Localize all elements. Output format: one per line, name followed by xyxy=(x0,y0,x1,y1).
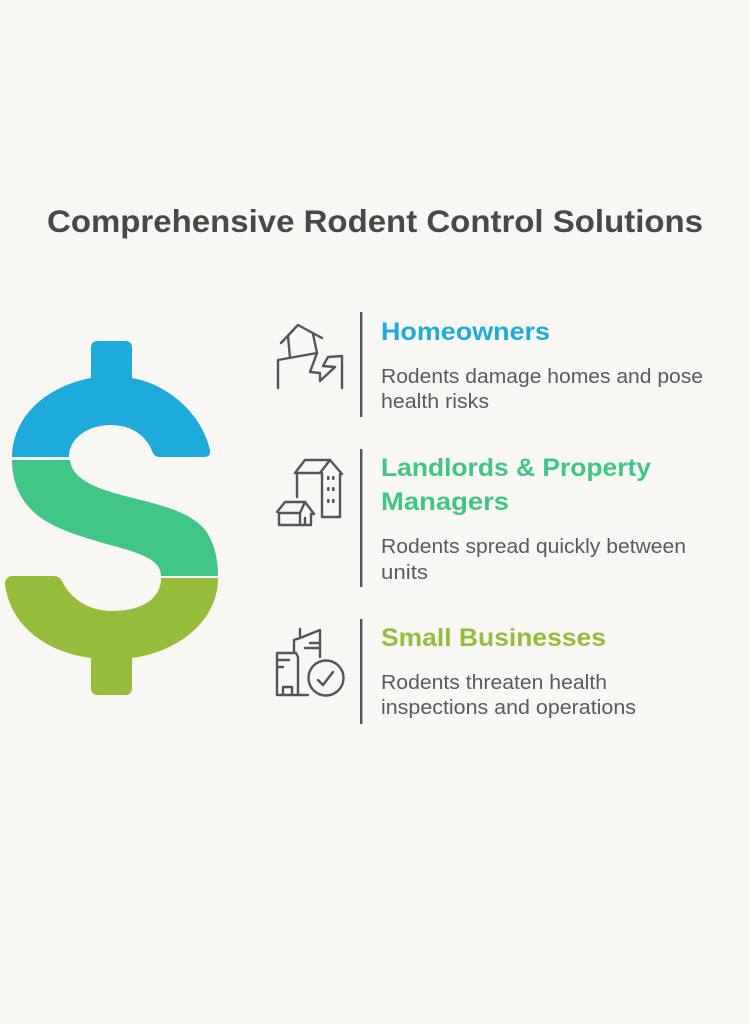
description: homeowners xyxy=(381,366,703,413)
icon: houses and apartment building xyxy=(277,460,342,525)
description: landlords xyxy=(381,536,686,584)
heading: landlords: Landlords & Property xyxy=(381,454,651,482)
icon: buildings with check mark xyxy=(277,629,344,696)
description: homeowners: health risks xyxy=(381,391,489,413)
description: small businesses xyxy=(381,672,636,719)
description: small businesses: Rodents threaten health xyxy=(381,672,607,694)
description: homeowners: Rodents damage homes and pose xyxy=(381,366,703,388)
description: small businesses: inspections and operations xyxy=(381,697,636,719)
heading: small businesses: Small Businesses xyxy=(381,624,606,652)
panel: homeowners xyxy=(278,312,703,417)
divider xyxy=(360,619,362,724)
panel: landlords and property managers xyxy=(277,449,686,587)
description: landlords: Rodents spread quickly between xyxy=(381,536,686,558)
heading: homeowners: Homeowners xyxy=(381,318,550,346)
dollar segment: olive bottom xyxy=(5,576,218,695)
dollar sign graphic xyxy=(5,341,218,695)
panel: small businesses xyxy=(277,619,636,724)
divider xyxy=(360,449,362,587)
icon windows xyxy=(327,476,335,503)
description: landlords: units xyxy=(381,562,428,584)
heading: landlords: Managers xyxy=(381,488,509,516)
dollar segment: blue top xyxy=(12,341,210,457)
dollar segment: green middle xyxy=(12,460,218,576)
title: Comprehensive Rodent Control Solutions xyxy=(47,203,703,239)
icon: damaged house xyxy=(278,325,342,388)
divider xyxy=(360,312,362,417)
heading: landlords xyxy=(381,454,651,516)
